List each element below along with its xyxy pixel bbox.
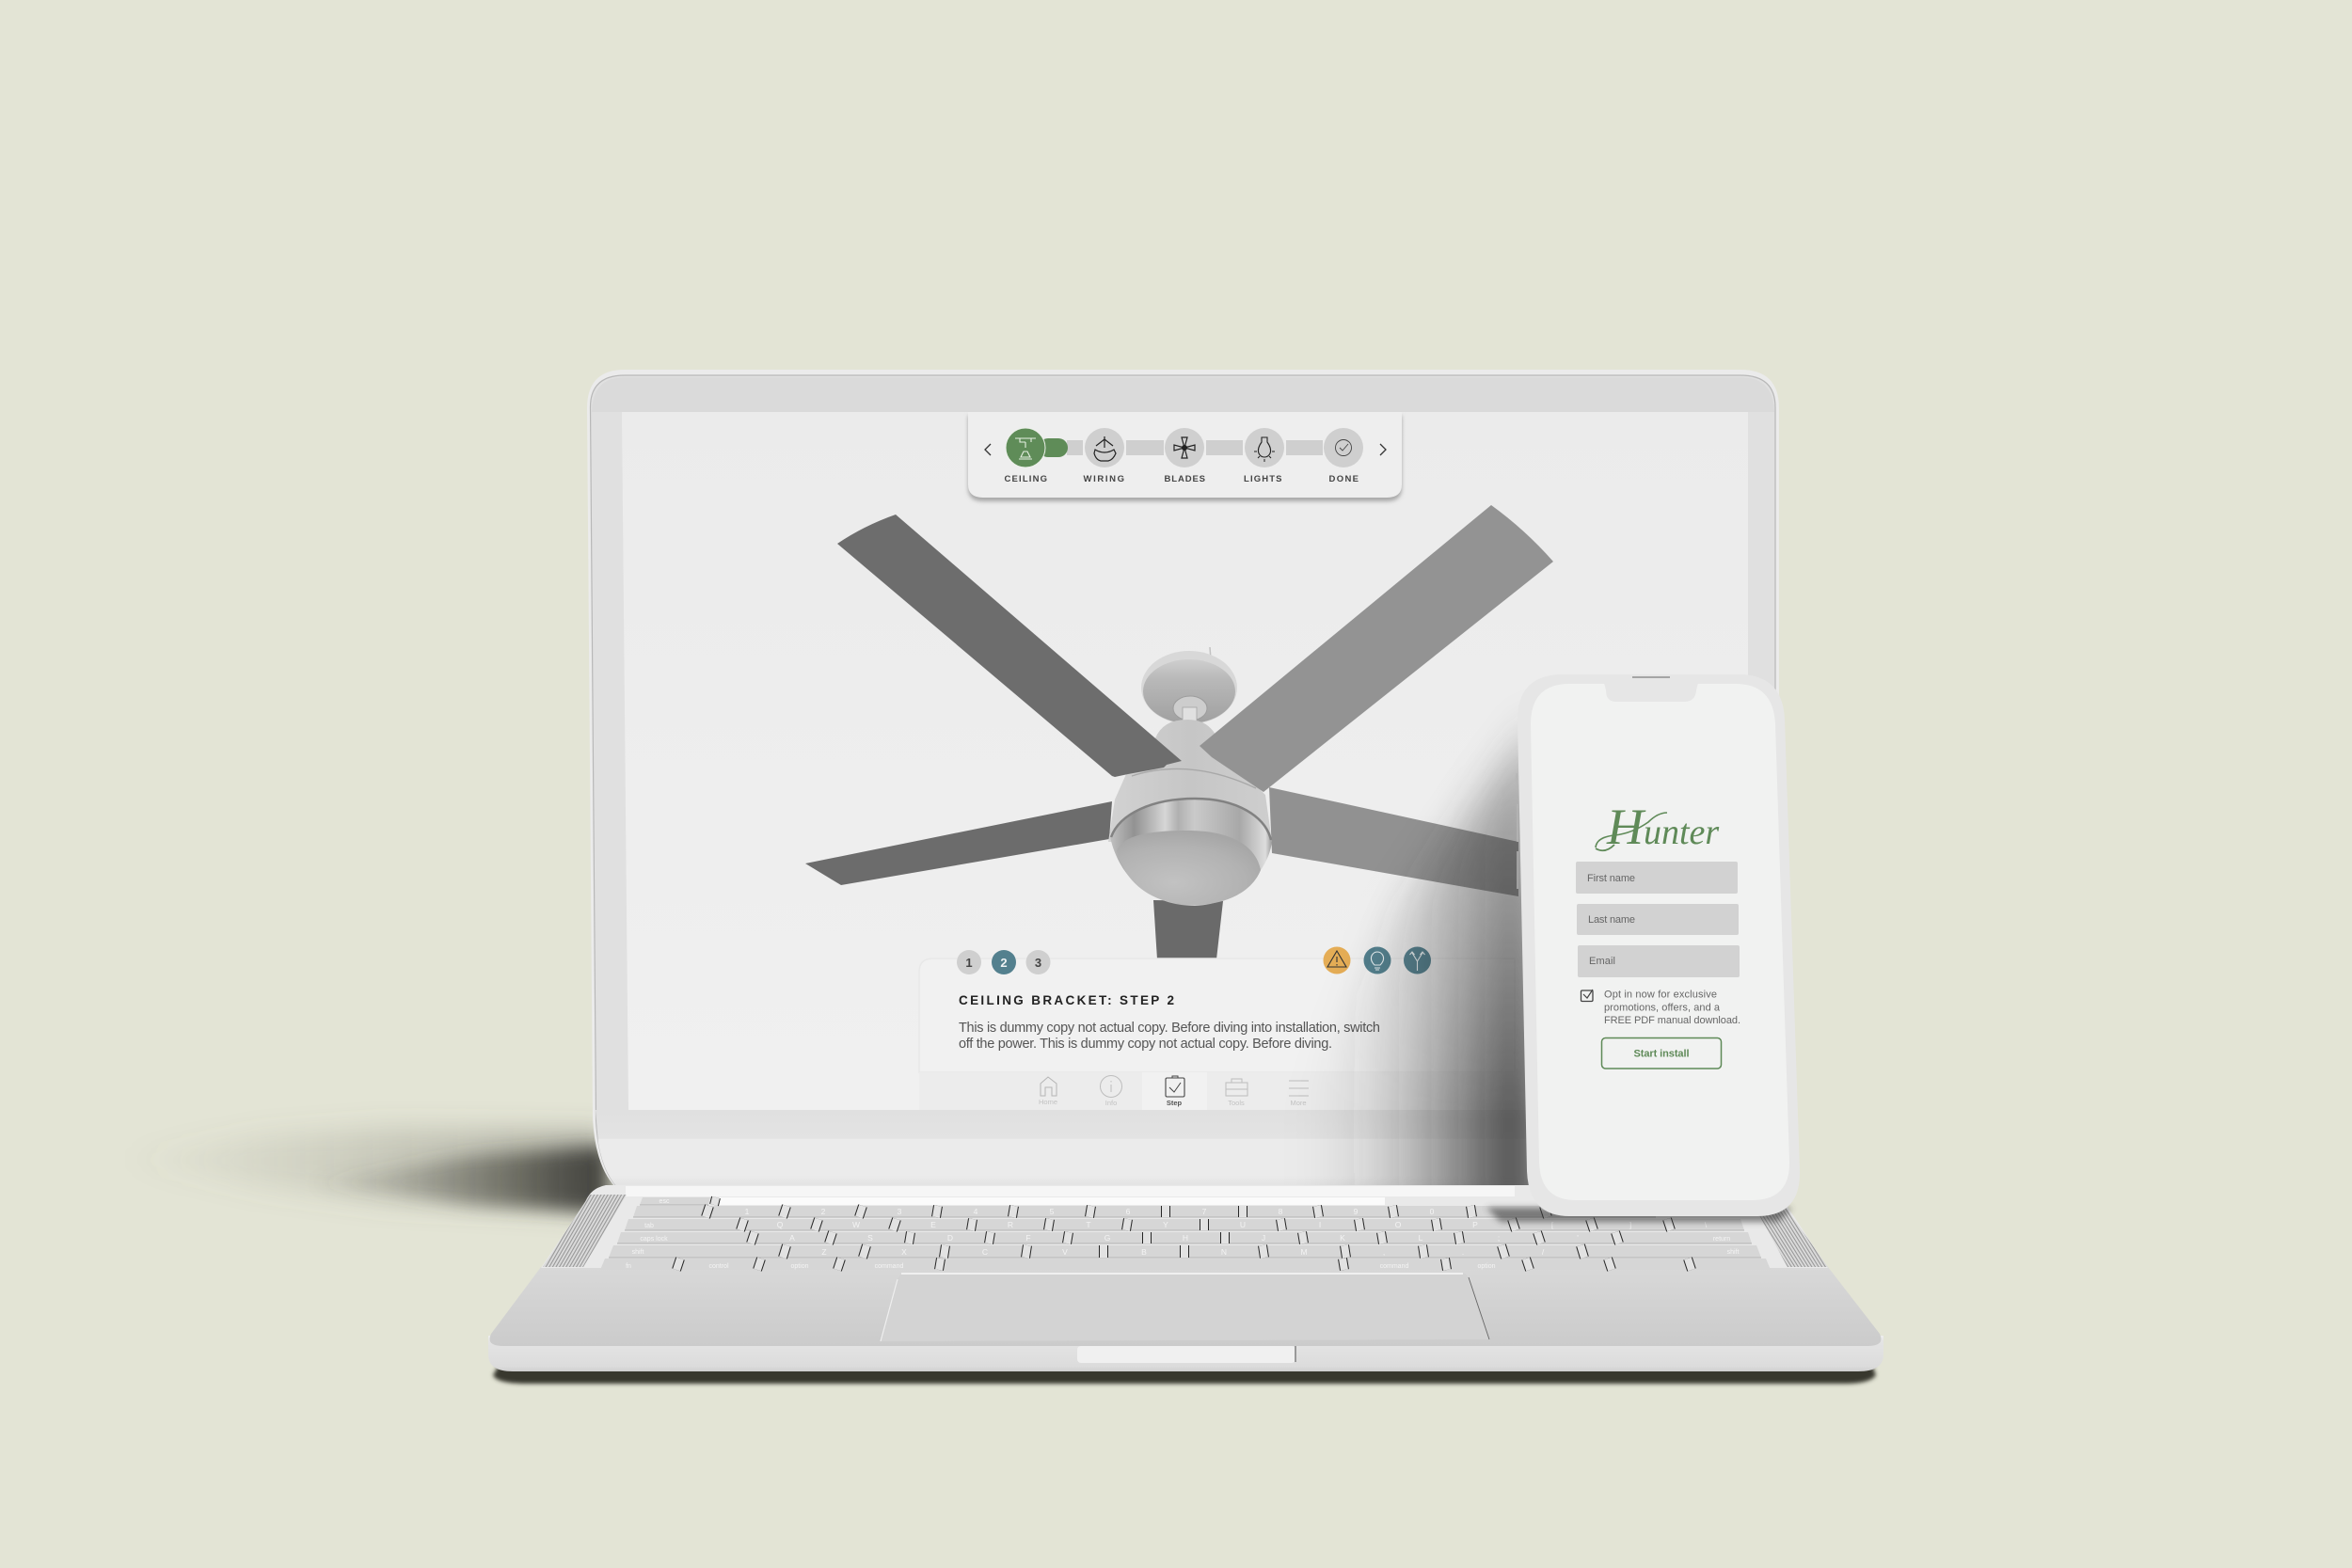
substep numbers: 1 (965, 956, 973, 970)
key legends: \ (1705, 1220, 1708, 1229)
key row lower edges (609, 1205, 1761, 1258)
key legends: command (1380, 1263, 1408, 1270)
key legends: M (1300, 1247, 1308, 1257)
key legends: 8 (1279, 1207, 1283, 1216)
key legends: 2 (821, 1207, 826, 1216)
opt in copy: promotions, offers, and a (1604, 1003, 1721, 1014)
substep numbers: 2 (1000, 956, 1008, 970)
nav labels (1039, 1098, 1307, 1107)
icon: wiring step (1085, 428, 1124, 467)
nav labels: Step (1167, 1099, 1183, 1107)
key legends: E (930, 1220, 936, 1229)
base shadow (493, 1366, 1876, 1384)
fan blade: bottom (1153, 900, 1223, 959)
key legends: ' (1577, 1233, 1579, 1243)
key legends: 4 (974, 1207, 978, 1216)
bottom navigation (919, 1072, 1521, 1110)
key legends: S (867, 1233, 873, 1243)
key legends: 7 (1202, 1207, 1207, 1216)
icon: done step (1324, 428, 1363, 467)
smartphone (1517, 674, 1800, 1216)
opt in copy: FREE PDF manual download. (1604, 1015, 1740, 1026)
instruction heading: CEILING BRACKET: STEP 2 (959, 993, 1174, 1007)
form field: first name (1576, 862, 1738, 894)
key legends: return (1713, 1236, 1730, 1243)
key legends: J (1262, 1233, 1265, 1243)
key legends: K (1340, 1233, 1345, 1243)
speaker grille right (1748, 1195, 1828, 1267)
nav labels: Tools (1228, 1099, 1245, 1107)
icon: light bulb tip (1364, 946, 1391, 974)
step labels: BLADES (1165, 474, 1206, 484)
key legends: P (1472, 1220, 1478, 1229)
base front edge (488, 1336, 1883, 1371)
icon: lights step (1245, 428, 1284, 467)
icon: previous chevron (985, 444, 991, 455)
key legends: fn (626, 1263, 631, 1270)
key legends: 5 (1050, 1207, 1055, 1216)
form field: last name: Last name (1588, 914, 1635, 926)
lid notch (1077, 1346, 1295, 1363)
key legends: V (1062, 1247, 1068, 1257)
key legends: G (1104, 1233, 1110, 1243)
nav labels: More (1290, 1099, 1307, 1107)
key legends: 3 (898, 1207, 902, 1216)
key legends: W (852, 1220, 860, 1229)
laptop (488, 370, 1883, 1384)
key legends: X (901, 1247, 907, 1257)
key legends: tab (644, 1223, 654, 1229)
key legends: shift (632, 1249, 644, 1256)
key legends: option (1477, 1263, 1496, 1270)
key legends: [ (1551, 1220, 1554, 1229)
fan light bowl (1110, 798, 1272, 906)
fan canopy (1141, 647, 1237, 726)
key legends: Z (821, 1247, 827, 1257)
key legends: T (1086, 1220, 1091, 1229)
form field: first name: First name (1587, 873, 1635, 884)
key legends: ; (1498, 1233, 1500, 1243)
key legends: caps lock (640, 1236, 668, 1243)
instruction body: This is dummy copy not actual copy. Before diving into installation, switch (959, 1021, 1380, 1036)
icon: ceiling step (1006, 428, 1045, 467)
fan motor housing (1108, 720, 1272, 842)
icon: next chevron (1380, 444, 1386, 455)
nav icon: home (1041, 1077, 1057, 1096)
fan blade: top right (1200, 505, 1553, 792)
progress bars (1039, 438, 1323, 457)
keyboard (600, 1197, 1771, 1270)
instruction panel (919, 946, 1515, 1072)
phone body (1518, 674, 1800, 1216)
key legends: D (947, 1233, 953, 1243)
key legends: O (1395, 1220, 1402, 1229)
housing seam (1132, 768, 1256, 788)
key rows (600, 1197, 1771, 1270)
key legends: esc (660, 1198, 670, 1205)
fan blade: right (1269, 787, 1518, 896)
step progress panel (968, 412, 1402, 501)
substep numbers (957, 950, 1050, 974)
step labels: DONE (1328, 474, 1360, 484)
key legends: 1 (745, 1207, 750, 1216)
key legends: 9 (1354, 1207, 1359, 1216)
icon: blades step (1165, 428, 1204, 467)
phone screen (1531, 684, 1789, 1200)
key legends: R (1008, 1220, 1013, 1229)
key legends: option (790, 1263, 809, 1270)
icon: branching arrows (1404, 946, 1431, 974)
fan blade: left (805, 801, 1112, 885)
trackpad (881, 1273, 1489, 1341)
checkbox (1581, 990, 1593, 1001)
nav icon: tools (1226, 1079, 1248, 1096)
nav icon: info (1101, 1076, 1121, 1097)
speaker grille left (543, 1195, 627, 1267)
laptop screen (622, 412, 1748, 1110)
phone notch (1604, 676, 1698, 702)
key legends: 0 (1430, 1207, 1435, 1216)
mockup scene (216, 370, 1883, 1386)
key legends: C (982, 1247, 988, 1257)
touch bar (719, 1197, 1385, 1205)
laptop lid (587, 370, 1779, 1187)
phone shadow on lid (1330, 724, 1529, 1185)
key legends: N (1221, 1247, 1227, 1257)
key legends: F (1025, 1233, 1031, 1243)
key legends: control (708, 1263, 729, 1270)
nav labels: Home (1039, 1098, 1057, 1106)
keyboard deck (541, 1185, 1828, 1268)
key legends: , (1383, 1247, 1385, 1257)
fan blade: top left (837, 515, 1182, 777)
laptop base (488, 1185, 1883, 1371)
key legends: A (789, 1233, 795, 1243)
icon: warning (1323, 946, 1351, 974)
key legends: Y (1163, 1220, 1168, 1229)
nav icon: more (1289, 1081, 1309, 1096)
instruction body (959, 1021, 1380, 1052)
key legends: H (1183, 1233, 1188, 1243)
nav icon: step checklist (1166, 1076, 1184, 1097)
key gaps (676, 1197, 1692, 1270)
key legends: . (1462, 1247, 1464, 1257)
step labels: WIRING (1084, 474, 1125, 484)
step labels: LIGHTS (1244, 474, 1283, 484)
form field: email (1578, 945, 1740, 977)
instruction body: off the power. This is dummy copy not actual copy. Before diving. (959, 1037, 1332, 1052)
opt in copy: Opt in now for exclusive (1604, 990, 1717, 1001)
key legends: L (1419, 1233, 1423, 1243)
ceiling fan (805, 505, 1553, 959)
key legends (626, 1198, 1739, 1270)
key legends: I (1319, 1220, 1321, 1229)
key legends: B (1141, 1247, 1147, 1257)
opt in copy (1604, 990, 1740, 1026)
key legends: Q (777, 1220, 784, 1229)
key legends: 6 (1126, 1207, 1131, 1216)
step labels (1005, 474, 1360, 484)
palm rest (490, 1267, 1881, 1346)
start install button (1601, 1038, 1722, 1069)
start install button: Start install (1633, 1048, 1690, 1059)
form field: last name (1577, 904, 1739, 935)
key legends: ] (1629, 1220, 1631, 1229)
Hunter logo: Hunter (1606, 799, 1719, 855)
key legends: U (1240, 1220, 1246, 1229)
form field: email: Email (1589, 956, 1615, 967)
nav labels: Info (1105, 1099, 1117, 1107)
laptop ground shadow (103, 1129, 607, 1212)
step labels: CEILING (1005, 474, 1048, 484)
key legends: shift (1727, 1249, 1739, 1256)
phone side buttons (1517, 773, 1518, 889)
substep numbers: 3 (1035, 956, 1041, 970)
key legends: command (875, 1263, 903, 1270)
phone shadow on keyboard (1486, 1208, 1792, 1222)
key legends: / (1542, 1247, 1545, 1257)
